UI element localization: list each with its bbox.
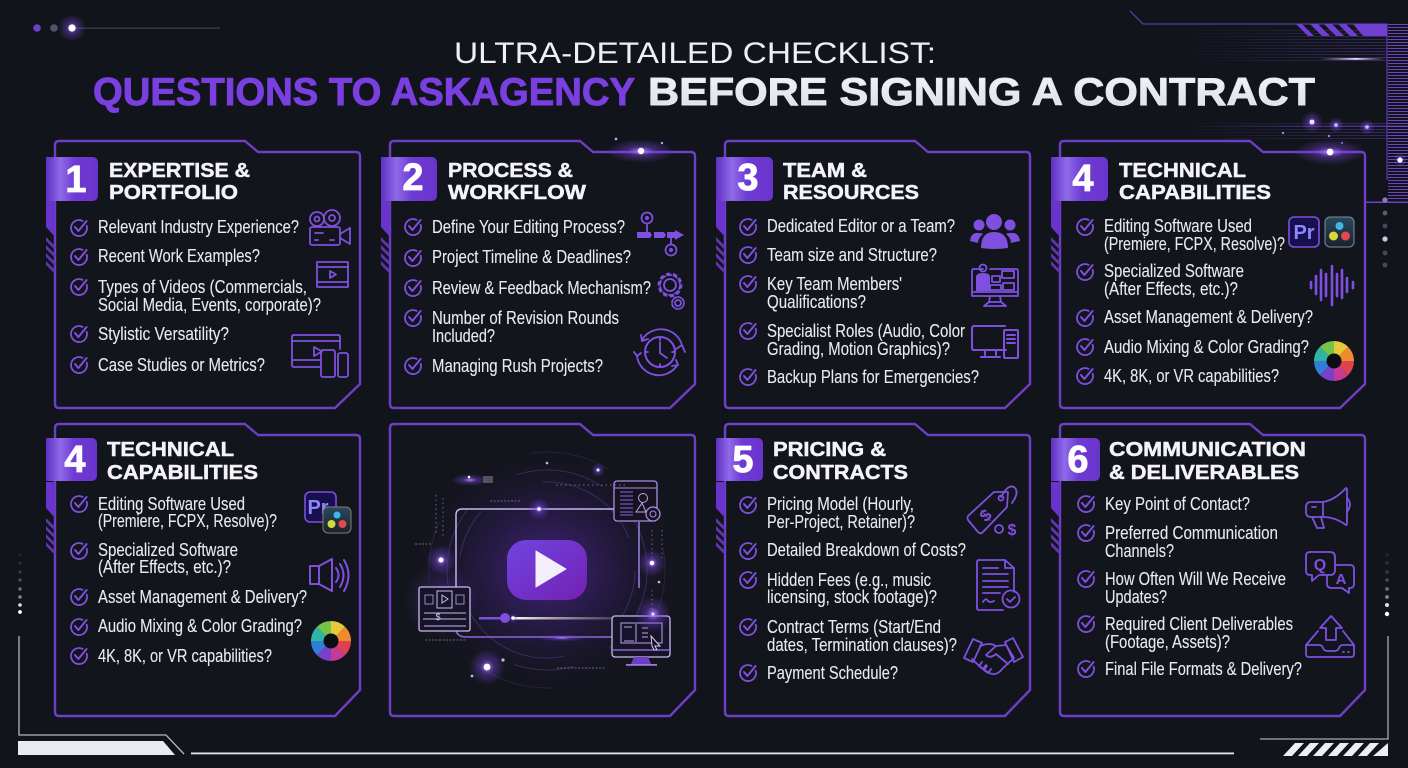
panel: technical capabilities second row <box>46 424 360 716</box>
heading <box>448 159 587 204</box>
heading: TEAM & <box>783 159 867 182</box>
item: Team size and Structure? <box>767 244 937 265</box>
title line 2 purple: QUESTIONS TO ASKAGENCY <box>93 71 635 114</box>
badge 4: 4 <box>64 439 86 481</box>
title line 1: ULTRA-DETAILED CHECKLIST: <box>454 37 936 70</box>
icon: color wheel <box>1314 341 1354 381</box>
badge 5 <box>716 438 763 481</box>
icon: audio waveform <box>1311 266 1353 305</box>
item <box>1077 215 1285 254</box>
glow accents on panels <box>607 138 1366 165</box>
heading: EXPERTISE & <box>109 159 250 182</box>
icon: question and answer: A <box>1336 571 1347 588</box>
item: dates, Termination clauses)? <box>767 634 957 655</box>
icon: clock with arrows <box>634 329 685 375</box>
item: Asset Management & Delivery? <box>98 586 307 607</box>
item <box>740 662 898 683</box>
icon: upload inbox <box>1306 616 1354 657</box>
item: Detailed Breakdown of Costs? <box>767 539 966 560</box>
panel 3: team and resources <box>716 141 1030 408</box>
heading <box>109 159 250 204</box>
item: Channels? <box>1105 540 1174 561</box>
title line 2 white: BEFORE SIGNING A CONTRACT <box>648 71 1316 114</box>
icon: price tag: $ <box>1008 522 1017 539</box>
item <box>71 276 321 315</box>
item: Asset Management & Delivery? <box>1104 306 1313 327</box>
item: Managing Rush Projects? <box>432 355 603 376</box>
icon: handshake <box>964 638 1023 674</box>
badge 2: 2 <box>402 157 424 199</box>
bottom left frame <box>18 636 184 755</box>
item: Grading, Motion Graphics)? <box>767 338 950 359</box>
item <box>740 273 902 312</box>
item <box>405 307 619 346</box>
item: Relevant Industry Experience? <box>98 216 299 237</box>
heading: CAPABILITIES <box>107 461 258 484</box>
glowing particles <box>415 462 671 685</box>
item: (After Effects, etc.)? <box>1104 278 1238 299</box>
item: (Premiere, FCPX, Resolve)? <box>1104 233 1285 254</box>
icon: price tag: $ <box>976 505 996 526</box>
item <box>1078 568 1286 607</box>
icon: gears <box>658 274 684 309</box>
item <box>1078 522 1278 561</box>
item: Case Studies or Metrics? <box>98 354 265 375</box>
heading: PRICING & <box>773 438 886 461</box>
item: Included? <box>432 325 495 346</box>
item: (Footage, Assets)? <box>1105 631 1230 652</box>
item: Define Your Editing Process? <box>432 216 625 237</box>
item: (Premiere, FCPX, Resolve)? <box>98 510 277 531</box>
icon: speaker <box>310 559 348 591</box>
item: Contract Terms (Start/End <box>767 616 941 637</box>
icon: megaphone <box>1306 488 1350 528</box>
item: Review & Feedback Mechanism? <box>432 277 651 298</box>
panel 1: expertise and portfolio <box>46 141 360 408</box>
panel 2: process and workflow <box>381 141 695 408</box>
icon: question and answer: Q <box>1314 557 1326 574</box>
bottom line <box>191 752 1234 754</box>
progress bar <box>479 613 612 623</box>
item: Key Team Members' <box>767 273 902 294</box>
heading <box>1119 159 1271 204</box>
icon: resolve <box>1325 217 1354 247</box>
top left dots decoration <box>33 14 220 42</box>
panel 6: communication and deliverables <box>1051 424 1365 716</box>
icon: devices <box>292 335 348 377</box>
item: Required Client Deliverables <box>1105 613 1293 634</box>
icon: film strip <box>317 262 348 287</box>
item: Audio Mixing & Color Grading? <box>98 615 302 636</box>
icon: color wheel <box>311 621 351 661</box>
icon: premiere <box>1289 217 1319 247</box>
item: 4K, 8K, or VR capabilities? <box>98 645 272 666</box>
badge 2 <box>381 157 437 201</box>
heading <box>773 438 908 484</box>
badge 3: 3 <box>737 157 759 199</box>
top right circuit decoration <box>1130 11 1408 203</box>
video frame <box>456 509 639 637</box>
badge 6 <box>1051 438 1100 481</box>
orbit arcs <box>429 452 665 688</box>
lower left dots <box>18 553 22 614</box>
icon: video camera <box>310 210 350 245</box>
item <box>1078 613 1293 652</box>
heading <box>783 159 919 204</box>
heading: PORTFOLIO <box>109 181 238 204</box>
icon: resolve <box>323 507 351 533</box>
item: Social Media, Events, corporate)? <box>98 294 321 315</box>
item: Editing Software Used <box>1104 215 1252 236</box>
item: Final File Formats & Delivery? <box>1105 658 1302 679</box>
heading: CAPABILITIES <box>1119 181 1271 204</box>
icon: desktop computer <box>972 326 1018 358</box>
item: Recent Work Examples? <box>98 245 260 266</box>
item: Key Point of Contact? <box>1105 493 1250 514</box>
heading: CONTRACTS <box>773 461 908 484</box>
item: Specialized Software <box>1104 260 1244 281</box>
item: Preferred Communication <box>1105 522 1278 543</box>
icon: price tag <box>968 486 1017 539</box>
item: Editing Software Used <box>98 493 245 514</box>
badge 5: 5 <box>732 439 754 481</box>
badge 3 <box>716 157 773 201</box>
panel 4: technical capabilities <box>1051 141 1365 408</box>
icon: premiere: Pr <box>1293 222 1315 244</box>
item <box>740 616 957 655</box>
item: Types of Videos (Commercials, <box>98 276 307 297</box>
timeline box icon <box>403 562 479 638</box>
item <box>71 539 238 577</box>
item: (After Effects, etc.)? <box>98 556 231 577</box>
badge 6: 6 <box>1067 439 1089 481</box>
item: Specialist Roles (Audio, Color <box>767 320 965 341</box>
heading: TECHNICAL <box>107 438 234 461</box>
panel 5: pricing and contracts <box>716 424 1030 716</box>
icon: people <box>970 214 1020 249</box>
item: Specialized Software <box>98 539 238 560</box>
badge 4 <box>46 438 97 481</box>
item: Hidden Fees (e.g., music <box>767 569 931 590</box>
item: 4K, 8K, or VR capabilities? <box>1104 365 1279 386</box>
item: Backup Plans for Emergencies? <box>767 366 979 387</box>
icon: contract document <box>977 560 1020 610</box>
heading: RESOURCES <box>783 181 919 204</box>
item: Pricing Model (Hourly, <box>767 493 914 514</box>
heading: & DELIVERABLES <box>1109 461 1299 484</box>
play button <box>507 540 587 600</box>
item: Qualifications? <box>767 291 866 312</box>
icon: premiere: Pr <box>307 497 329 519</box>
item: licensing, stock footage)? <box>767 586 937 607</box>
badge 1: 1 <box>65 159 87 201</box>
item <box>71 493 277 531</box>
item: Per-Project, Retainer)? <box>767 511 915 532</box>
heading: TECHNICAL <box>1119 159 1246 182</box>
heading: PROCESS & <box>448 159 573 182</box>
heading <box>107 438 258 484</box>
heading: COMMUNICATION <box>1109 438 1306 461</box>
window icon <box>614 481 660 521</box>
item <box>1077 260 1244 299</box>
right column dots <box>1382 197 1388 267</box>
badge 1 <box>46 157 98 201</box>
badge 4 <box>1051 157 1108 201</box>
monitor icon <box>612 616 670 666</box>
item: Payment Schedule? <box>767 662 898 683</box>
bottom right frame <box>1260 636 1388 756</box>
center glow <box>412 445 682 695</box>
badge 4: 4 <box>1072 158 1094 200</box>
panel: video illustration <box>390 424 695 716</box>
item: Project Timeline & Deadlines? <box>432 246 631 267</box>
heading: WORKFLOW <box>448 181 587 204</box>
item: Audio Mixing & Color Grading? <box>1104 336 1309 357</box>
item: Number of Revision Rounds <box>432 307 619 328</box>
timeline box icon: $ <box>435 612 441 622</box>
item: How Often Will We Receive <box>1105 568 1286 589</box>
item: Updates? <box>1105 586 1167 607</box>
lower right dots <box>1385 553 1389 616</box>
item <box>740 493 915 532</box>
icon: premiere <box>305 492 336 522</box>
item <box>740 569 937 607</box>
item: Dedicated Editor or a Team? <box>767 215 955 236</box>
heading <box>1109 438 1306 484</box>
item: Stylistic Versatility? <box>98 323 229 344</box>
item <box>740 320 965 359</box>
title <box>93 37 1316 114</box>
icon: workstation <box>972 264 1018 306</box>
icon: question and answer <box>1306 552 1354 593</box>
icon: timeline <box>637 212 684 256</box>
